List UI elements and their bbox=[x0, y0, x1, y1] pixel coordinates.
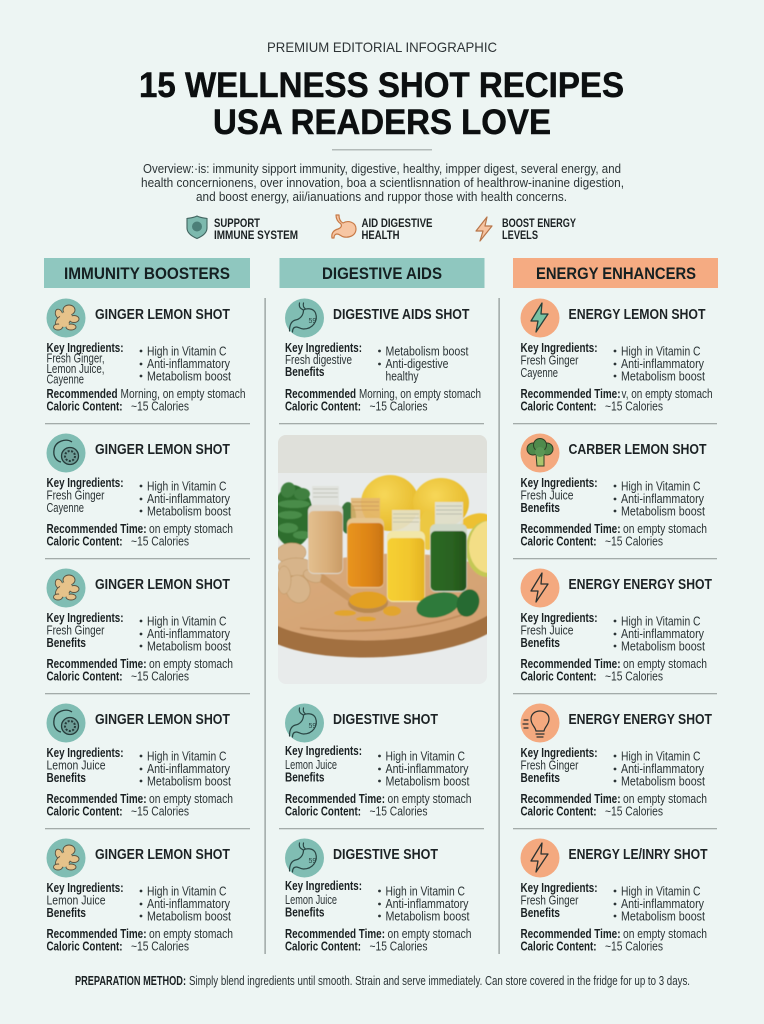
column header: immunity boosters bbox=[44, 258, 250, 288]
panel: immunity card 2 bbox=[46, 434, 233, 548]
time and calories: ~15 Calories bbox=[131, 804, 189, 818]
ingredients: Fresh Juice bbox=[520, 624, 574, 638]
time and calories: Caloric Content: bbox=[46, 804, 122, 818]
benefit row bbox=[187, 215, 576, 242]
card dividers bbox=[45, 423, 717, 829]
ingredients: Benefits bbox=[520, 501, 560, 515]
benefits list: Metabolism boost bbox=[147, 504, 231, 518]
time and calories: on empty stomach bbox=[623, 792, 707, 806]
recipe title: DIGESTIVE SHOT bbox=[333, 712, 438, 728]
time and calories bbox=[285, 792, 472, 818]
icon: stomach bbox=[290, 303, 316, 332]
spinach leaves bbox=[416, 588, 480, 618]
time and calories: Recommended bbox=[46, 387, 118, 401]
time and calories bbox=[520, 927, 707, 954]
time and calories: on empty stomach bbox=[623, 522, 707, 536]
ingredients bbox=[285, 744, 362, 784]
time and calories: Caloric Content: bbox=[285, 940, 361, 954]
time and calories: Caloric Content: bbox=[520, 534, 596, 548]
overview text: and boost energy, aii/ianuations and ruppor those with health concerns. bbox=[196, 189, 567, 204]
benefit: digestive: AID DIGESTIVE bbox=[362, 218, 433, 230]
time and calories: Caloric Content: bbox=[46, 940, 122, 954]
ingredients bbox=[46, 611, 124, 650]
time and calories bbox=[520, 657, 707, 684]
time and calories: ~15 Calories bbox=[131, 400, 189, 414]
time and calories bbox=[46, 522, 233, 548]
benefits list: High in Vitamin C bbox=[147, 750, 226, 764]
header eyebrow: PREMIUM EDITORIAL INFOGRAPHIC bbox=[267, 39, 497, 55]
time and calories: Caloric Content: bbox=[46, 534, 122, 548]
ingredients: Benefits bbox=[46, 636, 86, 650]
time and calories: ~15 Calories bbox=[131, 534, 189, 548]
panel: energy card 1 bbox=[520, 298, 713, 414]
time and calories: Recommended Time: bbox=[520, 792, 620, 806]
benefits list bbox=[614, 614, 705, 654]
benefits list: Anti-inflammatory bbox=[147, 627, 231, 641]
benefits list: High in Vitamin C bbox=[147, 884, 226, 898]
icon: bolt bbox=[531, 573, 548, 602]
time and calories: on empty stomach bbox=[388, 927, 472, 941]
ingredients bbox=[46, 341, 124, 386]
greens bbox=[278, 482, 356, 546]
panel: immunity card 1 bbox=[46, 298, 246, 414]
ingredients bbox=[520, 611, 598, 650]
benefits list: Metabolism boost bbox=[621, 910, 705, 924]
time and calories: Caloric Content: bbox=[520, 940, 596, 954]
time and calories: Recommended Time: bbox=[46, 792, 146, 806]
ingredients: Key Ingredients: bbox=[520, 881, 598, 895]
ingredients: Benefits bbox=[520, 636, 560, 650]
benefits list: Metabolism boost bbox=[621, 504, 705, 518]
column header: immunity boosters: IMMUNITY BOOSTERS bbox=[64, 264, 230, 283]
time and calories: on empty stomach bbox=[149, 522, 233, 536]
ingredients: Lemon Juice bbox=[46, 758, 106, 772]
time and calories: ~15 Calories bbox=[605, 940, 663, 954]
benefits list: High in Vitamin C bbox=[621, 614, 700, 628]
ingredients: Key Ingredients: bbox=[46, 341, 124, 355]
title: 15 WELLNESS SHOT RECIPES bbox=[139, 66, 624, 105]
ingredients bbox=[46, 476, 124, 515]
shot bottle: lemon bbox=[387, 510, 425, 602]
panel: immunity card 3 bbox=[46, 568, 233, 684]
recipe title: GINGER LEMON SHOT bbox=[95, 442, 230, 458]
recipe title: GINGER LEMON SHOT bbox=[95, 712, 230, 728]
benefits list: Metabolism boost bbox=[147, 910, 231, 924]
column header: digestive aids bbox=[280, 258, 484, 288]
ingredients: Key Ingredients: bbox=[520, 746, 598, 760]
recipe title: ENERGY LEMON SHOT bbox=[568, 307, 706, 323]
panel: energy card 5 bbox=[520, 838, 708, 954]
benefits list bbox=[614, 884, 705, 924]
ingredients: Benefits bbox=[520, 771, 560, 785]
recipe title: GINGER LEMON SHOT bbox=[95, 847, 230, 863]
ingredients: Benefits bbox=[46, 771, 86, 785]
ingredients: Cayenne bbox=[46, 501, 84, 515]
time and calories: Recommended Time: bbox=[520, 522, 620, 536]
benefits list bbox=[378, 750, 470, 788]
panel: immunity card 4 bbox=[46, 704, 233, 818]
icon: ginger bbox=[53, 845, 79, 870]
benefits list bbox=[614, 344, 705, 384]
benefits list: Anti-inflammatory bbox=[621, 627, 705, 641]
ingredients: Key Ingredients: bbox=[46, 476, 124, 490]
panel: energy card 2 bbox=[520, 434, 707, 548]
benefits list: Anti-digestive bbox=[386, 357, 449, 371]
benefits list: healthy bbox=[386, 370, 419, 384]
ingredients: Key Ingredients: bbox=[46, 881, 124, 895]
benefit: immune: SUPPORT bbox=[214, 218, 260, 230]
benefits list: High in Vitamin C bbox=[147, 480, 226, 494]
panel: digestive card 5 bbox=[285, 838, 472, 954]
icon: broccoli bbox=[527, 438, 553, 466]
ingredients: Lemon Juice bbox=[285, 893, 337, 907]
lemon slice bbox=[466, 520, 487, 578]
column header: energy enhancers: ENERGY ENHANCERS bbox=[536, 264, 696, 283]
icon: lemon bbox=[54, 440, 78, 464]
column header: digestive aids: DIGESTIVE AIDS bbox=[322, 264, 442, 283]
recipe title: GINGER LEMON SHOT bbox=[95, 577, 230, 593]
time and calories: Recommended Time: bbox=[520, 657, 620, 671]
benefits list bbox=[378, 884, 470, 924]
shot bottle: turmeric bbox=[347, 498, 384, 588]
time and calories: ~15 Calories bbox=[605, 804, 663, 818]
panel: immunity card 5 bbox=[46, 838, 233, 954]
overview text: Overview:·is: immunity sipport immunity, digestive, healthy, impper digest, several energy, and bbox=[143, 161, 621, 176]
time and calories: v, on empty stomach bbox=[622, 387, 713, 401]
benefit: immune bbox=[214, 218, 298, 242]
ingredients bbox=[520, 476, 598, 515]
photo: wellness shots on a wooden board bbox=[278, 435, 487, 684]
title bbox=[139, 66, 624, 142]
ingredients: Benefits bbox=[46, 906, 86, 920]
ingredients: Lemon Juice bbox=[46, 894, 106, 908]
ingredients: Benefits bbox=[285, 770, 325, 784]
time and calories bbox=[46, 927, 233, 954]
time and calories: Recommended Time: bbox=[285, 792, 385, 806]
recipe title: ENERGY ENERGY SHOT bbox=[568, 577, 712, 593]
benefit: immune: IMMUNE SYSTEM bbox=[214, 230, 298, 242]
ingredients: Key Ingredients: bbox=[285, 744, 362, 758]
benefits list: Metabolism boost bbox=[147, 370, 231, 384]
icon: stomach bbox=[290, 708, 316, 737]
benefits list bbox=[614, 750, 705, 788]
icon: ginger bbox=[53, 305, 79, 330]
title: USA READERS LOVE bbox=[213, 103, 551, 142]
ingredients: Lemon Juice bbox=[285, 758, 337, 772]
ingredients: Cayenne bbox=[520, 366, 558, 380]
ginger root bbox=[278, 542, 322, 603]
time and calories: on empty stomach bbox=[623, 927, 707, 941]
icon: green bolt bbox=[531, 303, 548, 332]
time and calories: Recommended Time: bbox=[520, 387, 620, 401]
benefits list: High in Vitamin C bbox=[621, 344, 700, 358]
benefits list: Metabolism boost bbox=[621, 640, 705, 654]
benefits list bbox=[140, 884, 231, 924]
ingredients: Key Ingredients: bbox=[520, 341, 598, 355]
time and calories: Caloric Content: bbox=[520, 400, 596, 414]
icon: light bulb bbox=[523, 711, 549, 737]
benefits list: Anti-inflammatory bbox=[147, 762, 231, 776]
time and calories: on empty stomach bbox=[149, 792, 233, 806]
ingredients bbox=[520, 746, 598, 785]
ingredients: Benefits bbox=[520, 906, 560, 920]
icon: shield bbox=[187, 216, 207, 238]
panel: energy card 4 bbox=[520, 704, 712, 818]
time and calories: on empty stomach bbox=[388, 792, 472, 806]
time and calories: Caloric Content: bbox=[46, 400, 122, 414]
time and calories: Recommended Time: bbox=[46, 657, 146, 671]
ingredients bbox=[285, 879, 362, 920]
time and calories: ~15 Calories bbox=[605, 400, 663, 414]
icon: stomach bbox=[290, 843, 316, 872]
benefits list: Metabolism boost bbox=[147, 774, 231, 788]
benefits list: Metabolism boost bbox=[386, 774, 470, 788]
benefits list: High in Vitamin C bbox=[621, 750, 700, 764]
time and calories: ~15 Calories bbox=[370, 940, 428, 954]
time and calories: Caloric Content: bbox=[520, 670, 596, 684]
benefits list: High in Vitamin C bbox=[621, 480, 700, 494]
ingredients: Key Ingredients: bbox=[46, 611, 124, 625]
time and calories: on empty stomach bbox=[149, 657, 233, 671]
icon: lemon bbox=[54, 710, 78, 734]
time and calories bbox=[520, 792, 707, 818]
ingredients bbox=[520, 341, 598, 380]
benefits list bbox=[140, 614, 231, 654]
time and calories bbox=[46, 657, 233, 684]
benefits list bbox=[140, 750, 231, 788]
recipe title: ENERGY LE/INRY SHOT bbox=[568, 847, 708, 863]
time and calories: Morning, on empty stomach bbox=[359, 387, 481, 401]
benefits list: Anti-inflammatory bbox=[621, 897, 705, 911]
time and calories bbox=[520, 387, 713, 414]
benefit: digestive bbox=[362, 218, 433, 242]
benefits list: Metabolism boost bbox=[386, 910, 470, 924]
benefits list: High in Vitamin C bbox=[147, 344, 226, 358]
benefits list: Anti-inflammatory bbox=[386, 762, 469, 776]
icon: ginger bbox=[53, 575, 79, 600]
ingredients: Fresh Juice bbox=[520, 488, 574, 502]
time and calories: ~15 Calories bbox=[605, 534, 663, 548]
recipe title: GINGER LEMON SHOT bbox=[95, 307, 230, 323]
ingredients: Lemon Juice, bbox=[46, 362, 104, 376]
time and calories: on empty stomach bbox=[149, 927, 233, 941]
benefits list: Metabolism boost bbox=[621, 774, 705, 788]
benefits list bbox=[140, 344, 231, 384]
time and calories: Morning, on empty stomach bbox=[120, 387, 246, 401]
ingredients: Cayenne bbox=[46, 372, 84, 386]
benefits list: Anti-inflammatory bbox=[621, 492, 705, 506]
time and calories: Recommended Time: bbox=[46, 522, 146, 536]
panel: digestive card 1 bbox=[285, 298, 481, 414]
time and calories: Caloric Content: bbox=[285, 400, 361, 414]
benefits list: Metabolism boost bbox=[621, 370, 705, 384]
time and calories: Recommended Time: bbox=[46, 927, 146, 941]
shot bottle: green bbox=[430, 502, 467, 592]
recipe title: CARBER LEMON SHOT bbox=[568, 442, 707, 458]
recipe title: ENERGY ENERGY SHOT bbox=[568, 712, 712, 728]
time and calories: Caloric Content: bbox=[46, 670, 122, 684]
time and calories bbox=[46, 387, 246, 414]
overview text: health concernionens, over innovation, boa a scientlisnnation of healthrow-inanine digestion, bbox=[141, 175, 624, 190]
ingredients: Fresh digestive bbox=[285, 353, 352, 367]
lemons bbox=[361, 475, 491, 550]
time and calories: ~15 Calories bbox=[605, 670, 663, 684]
ingredients: Key Ingredients: bbox=[520, 611, 598, 625]
time and calories: Recommended Time: bbox=[285, 927, 385, 941]
benefit: digestive: HEALTH bbox=[362, 230, 400, 242]
time and calories: ~15 Calories bbox=[131, 670, 189, 684]
ingredients bbox=[46, 746, 124, 785]
ingredients: Key Ingredients: bbox=[46, 746, 124, 760]
ingredients bbox=[285, 341, 362, 379]
benefit: energy: BOOST ENERGY bbox=[502, 218, 576, 230]
footer: preparation method: PREPARATION METHOD: bbox=[75, 974, 186, 988]
ingredients: Benefits bbox=[285, 906, 325, 920]
spoon of turmeric bbox=[320, 573, 401, 622]
ingredients: Fresh Ginger bbox=[520, 758, 578, 772]
benefits list: Metabolism boost bbox=[386, 344, 469, 358]
time and calories: Recommended Time: bbox=[520, 927, 620, 941]
time and calories: ~15 Calories bbox=[370, 400, 428, 414]
benefit: energy bbox=[502, 218, 576, 242]
recipe title: DIGESTIVE SHOT bbox=[333, 847, 438, 863]
shot bottle: ginger bbox=[308, 486, 343, 574]
panel: digestive card 4 bbox=[285, 704, 472, 818]
icon: bolt bbox=[476, 217, 492, 241]
benefits list bbox=[614, 480, 705, 518]
benefits list bbox=[140, 480, 231, 518]
time and calories bbox=[285, 387, 481, 414]
time and calories bbox=[285, 927, 472, 954]
wooden board bbox=[278, 553, 487, 658]
column header: energy enhancers bbox=[513, 258, 718, 288]
time and calories bbox=[46, 792, 233, 818]
panel: energy card 3 bbox=[520, 568, 712, 684]
benefits list: Metabolism boost bbox=[147, 640, 231, 654]
benefits list: Anti-inflammatory bbox=[621, 357, 705, 371]
ingredients bbox=[46, 881, 124, 920]
benefits list bbox=[378, 344, 469, 384]
benefits list: High in Vitamin C bbox=[386, 884, 465, 898]
ingredients: Fresh Ginger bbox=[46, 624, 104, 638]
benefits list: High in Vitamin C bbox=[386, 750, 465, 764]
icon: stomach bbox=[332, 215, 356, 238]
time and calories: ~15 Calories bbox=[131, 940, 189, 954]
time and calories: Recommended bbox=[285, 387, 356, 401]
benefits list: High in Vitamin C bbox=[621, 884, 700, 898]
benefits list: Anti-inflammatory bbox=[621, 762, 705, 776]
time and calories: Caloric Content: bbox=[285, 804, 361, 818]
ingredients: Fresh Ginger bbox=[520, 894, 578, 908]
time and calories bbox=[520, 522, 707, 548]
icon: bolt bbox=[531, 843, 548, 872]
ingredients: Fresh Ginger bbox=[520, 354, 578, 368]
ingredients: Fresh Ginger, bbox=[46, 352, 104, 366]
ingredients bbox=[520, 881, 598, 920]
ingredients: Benefits bbox=[285, 365, 325, 379]
benefits list: Anti-inflammatory bbox=[147, 357, 231, 371]
benefits list: Anti-inflammatory bbox=[147, 897, 231, 911]
time and calories: on empty stomach bbox=[623, 657, 707, 671]
time and calories: ~15 Calories bbox=[370, 804, 428, 818]
ingredients: Key Ingredients: bbox=[520, 476, 598, 490]
benefits list: Anti-inflammatory bbox=[386, 897, 469, 911]
time and calories: Caloric Content: bbox=[520, 804, 596, 818]
recipe title: DIGESTIVE AIDS SHOT bbox=[333, 307, 470, 323]
benefit: energy: LEVELS bbox=[502, 230, 538, 242]
ingredients: Key Ingredients: bbox=[285, 341, 362, 355]
ingredients: Key Ingredients: bbox=[285, 879, 362, 893]
ingredients: Fresh Ginger bbox=[46, 488, 104, 502]
benefits list: High in Vitamin C bbox=[147, 614, 226, 628]
benefits list: Anti-inflammatory bbox=[147, 492, 231, 506]
overview text bbox=[141, 161, 624, 204]
